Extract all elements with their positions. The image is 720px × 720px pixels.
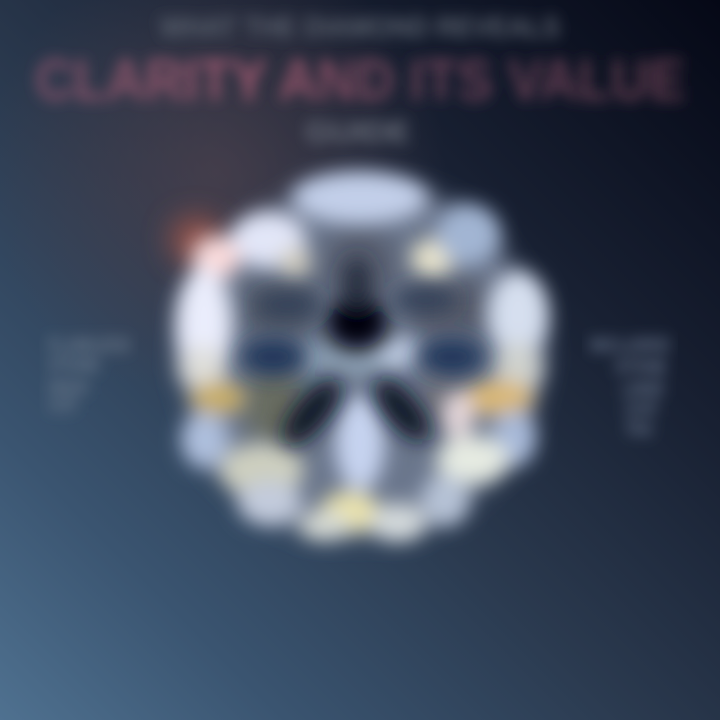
- kicker heading: WHAT THE DIAMOND REVEALS: [160, 12, 560, 44]
- left side note: FLAWLESS: [48, 334, 130, 357]
- dark facets: [241, 257, 484, 453]
- left side note: [48, 334, 130, 417]
- subtitle: GUIDE: [306, 116, 410, 149]
- inner facets dark: [243, 225, 485, 447]
- right side note: LOWER: [622, 378, 664, 401]
- right side note: TAG: [625, 418, 653, 441]
- diamond body: [178, 180, 546, 535]
- right side note: INCLUDED: [590, 334, 670, 357]
- bright rim facets: [176, 172, 548, 541]
- right side note: COST: [625, 398, 659, 421]
- diamond illustration: [176, 172, 548, 541]
- right side note: [590, 334, 670, 441]
- red glow at diamond edge: [172, 218, 220, 262]
- left side note: COST: [48, 394, 78, 417]
- left side note: HIGH: [48, 376, 88, 399]
- left side note: STONE: [48, 354, 100, 377]
- title: CLARITY AND ITS VALUE: [35, 48, 685, 113]
- right side note: STONE: [615, 356, 667, 379]
